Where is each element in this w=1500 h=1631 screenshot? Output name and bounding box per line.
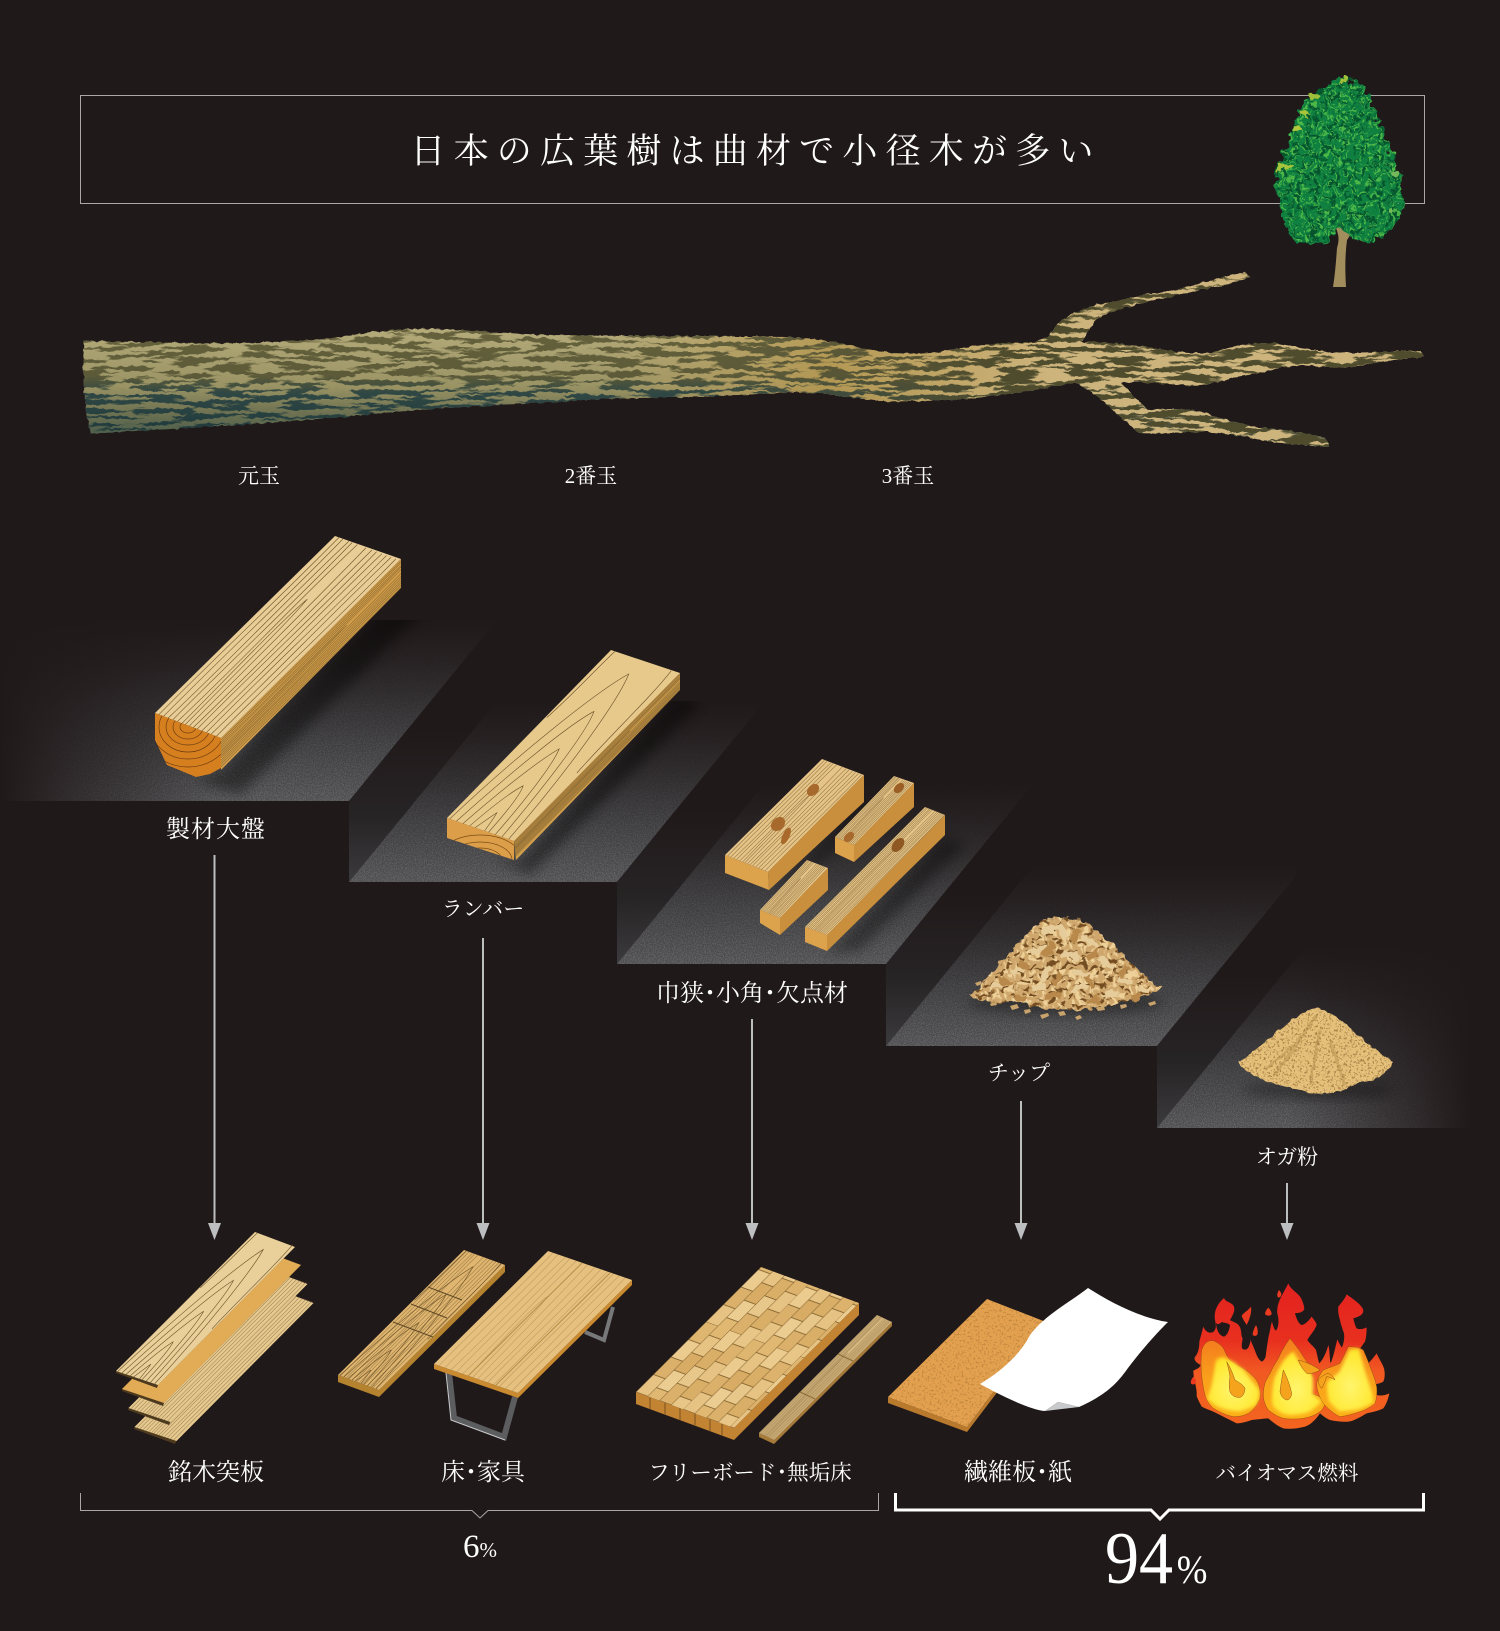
offcut A <box>725 759 864 890</box>
arrow 5 <box>1280 1183 1294 1240</box>
label: 繊維板・紙: 繊維板･紙 <box>964 1459 1072 1486</box>
wood chip pile <box>969 916 1162 1020</box>
title frame <box>80 96 1424 204</box>
icon: tree <box>1270 70 1410 287</box>
label: 巾狭・小角・欠点材: 巾狭･小角･欠点材 <box>656 980 848 1007</box>
label: 2番玉: 2番玉 <box>565 464 617 488</box>
step 1 left fade <box>0 620 230 801</box>
arrow 4 <box>1014 1101 1028 1240</box>
step 3 riser <box>617 701 765 964</box>
value: 94% <box>1105 1518 1207 1600</box>
veneer 2 <box>122 1250 301 1406</box>
flame droplets <box>1191 1290 1281 1384</box>
label: オガ粉: オガ粉 <box>1256 1145 1318 1169</box>
stairs <box>0 620 1500 1128</box>
label: 元玉: 元玉 <box>238 464 280 488</box>
flame teardrops <box>1227 1360 1335 1400</box>
label: バイオマス燃料: バイオマス燃料 <box>1216 1462 1359 1485</box>
parquet free board <box>636 1267 859 1440</box>
label: ランバー: ランバー <box>442 897 524 921</box>
offcut D <box>805 807 945 951</box>
fibreboard <box>888 1299 1044 1432</box>
flame hole <box>1216 1322 1230 1337</box>
label: 銘木突板: 銘木突板 <box>168 1459 264 1486</box>
floor speckle <box>0 620 1500 1128</box>
arrow 2 <box>476 938 490 1240</box>
sawdust pile <box>1238 1008 1393 1102</box>
digits 94: 94 <box>1105 1518 1173 1600</box>
step 3 floor <box>617 783 1034 964</box>
flame middle left <box>1201 1341 1260 1417</box>
icon: fire <box>1191 1283 1389 1429</box>
step 2 riser <box>349 620 497 882</box>
veneer 4 <box>134 1288 314 1444</box>
table front leg <box>446 1373 515 1440</box>
bracket: 94% <box>896 1493 1424 1519</box>
flame yellow cores <box>1207 1349 1373 1415</box>
scattered chips <box>975 981 1156 1020</box>
paper sheet <box>980 1288 1168 1411</box>
offcut lumber <box>725 759 965 955</box>
arrow 1 <box>208 855 221 1240</box>
step 5 right fade <box>1290 947 1500 1128</box>
veneer 3 <box>128 1269 308 1425</box>
table top <box>434 1251 632 1398</box>
bracket: 6% <box>80 1493 878 1518</box>
flame middle centre <box>1263 1338 1327 1419</box>
table back leg <box>585 1307 613 1340</box>
step 4 riser <box>886 783 1034 1046</box>
table <box>434 1251 632 1440</box>
beam: 製材大盤 <box>143 536 430 795</box>
arrow 3 <box>746 1019 758 1240</box>
flame middle right <box>1317 1347 1377 1417</box>
value: 6%: 6% <box>463 1529 497 1565</box>
veneer 1 <box>116 1232 295 1388</box>
solid strip <box>759 1315 892 1444</box>
label: フリーボード・無垢床: フリーボード･無垢床 <box>648 1461 852 1485</box>
label: 3番玉: 3番玉 <box>882 464 934 488</box>
step 5 riser <box>1157 865 1305 1128</box>
offcut B <box>835 776 914 862</box>
step 4 floor <box>886 865 1305 1046</box>
step 5 floor <box>1157 947 1500 1128</box>
beam: ランバー <box>438 650 700 885</box>
log with branches <box>82 272 1424 447</box>
title: 日本の広葉樹は曲材で小径木が多い <box>410 132 1102 171</box>
step 1 floor <box>0 620 497 801</box>
offcut C <box>760 860 828 935</box>
step 2 floor <box>349 701 765 882</box>
label: チップ: チップ <box>988 1061 1050 1085</box>
label: 製材大盤: 製材大盤 <box>166 816 266 843</box>
flooring plank <box>338 1250 505 1397</box>
veneer stack <box>116 1232 314 1444</box>
label: 床・家具: 床･家具 <box>441 1459 526 1486</box>
percent sign: % <box>1177 1549 1207 1592</box>
